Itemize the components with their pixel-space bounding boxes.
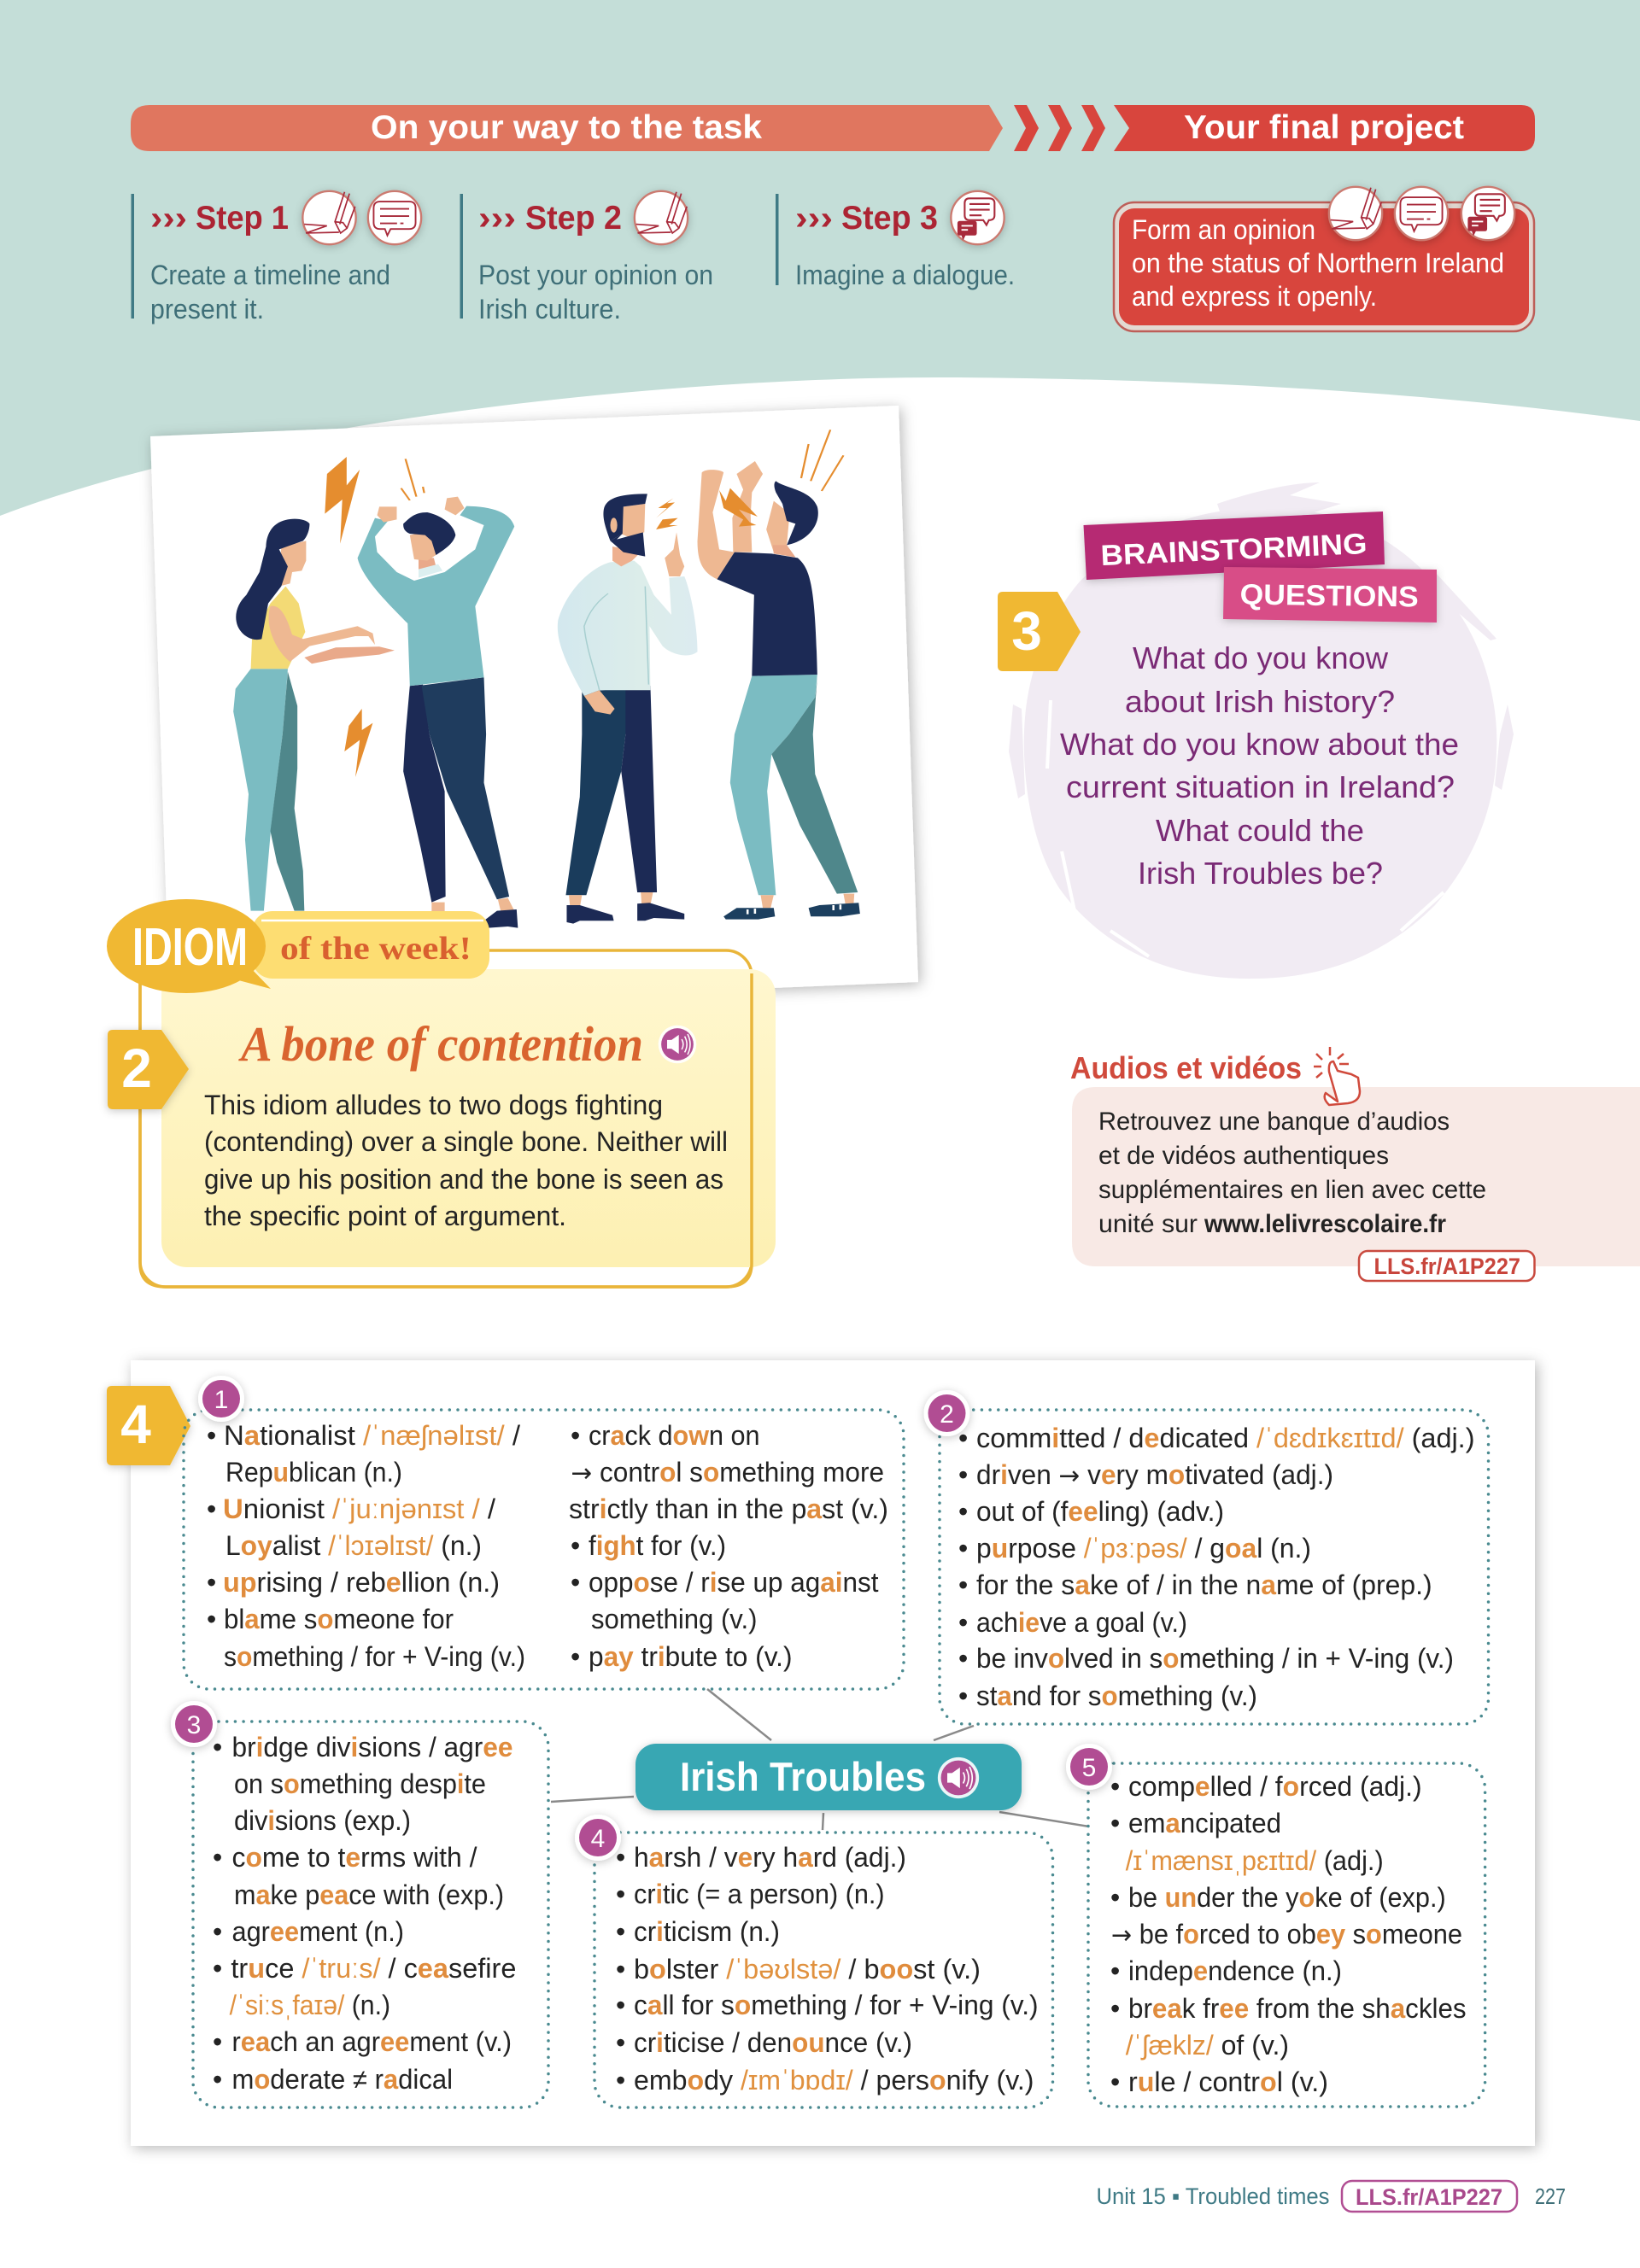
vocabulary box 1: • [571, 1420, 580, 1451]
vocabulary box 5 [1066, 1744, 1485, 2107]
idiom explanation: the specific point of argument. [204, 1201, 566, 1231]
vocabulary box 1: pay tribute to (v.) [589, 1641, 793, 1672]
icon: clicking hand [1314, 1047, 1360, 1105]
vocabulary box 3: divisions (exp.) [234, 1805, 411, 1836]
vocabulary box 1: strictly than in the past (v.) [569, 1493, 888, 1524]
link badge: LLS.fr/A1P227 [1356, 2184, 1502, 2210]
vocabulary box 3: • [213, 2064, 222, 2095]
arrows: three chevrons [1014, 105, 1105, 151]
vocabulary box 4: call for something / for + V-ing (v.) [634, 1990, 1039, 2020]
step 2 [460, 191, 713, 324]
vocabulary box 4: critic (= a person) (n.) [634, 1879, 885, 1909]
idiom explanation: (contending) over a single bone. Neither will [204, 1126, 728, 1157]
badge: number 4 [107, 1386, 190, 1465]
step 1: Step 1 [196, 200, 289, 237]
brush blob background [1009, 482, 1514, 979]
badge: number 2: 2 [121, 1038, 152, 1099]
step 2: ››› [478, 200, 516, 237]
vocabulary box 5: • [1110, 1882, 1120, 1913]
icon: dialogue [1461, 187, 1514, 240]
vocabulary box 1: → control something more [571, 1457, 884, 1488]
body text: www.lelivrescolaire.fr [1204, 1210, 1446, 1238]
vocabulary box 1: something / for + V-ing (v.) [224, 1641, 525, 1672]
banner: on your way to the task [131, 105, 1003, 151]
vocabulary box 3: make peace with (exp.) [234, 1879, 504, 1910]
questions text: What do you know about the [1060, 727, 1459, 762]
footer: 227 [1535, 2183, 1566, 2209]
vocabulary box 2: • [958, 1533, 968, 1564]
vocabulary box 1: crack down on [589, 1420, 760, 1451]
vocabulary box 1: • [207, 1604, 216, 1634]
vocabulary box 5: be under the yoke of (exp.) [1128, 1882, 1446, 1913]
vocabulary box 1: Nationalist /ˈnæʃnəlɪst/ / [224, 1420, 520, 1451]
vocabulary box 4: criticise / denounce (v.) [634, 2027, 912, 2058]
vocabulary box 4: • [616, 1990, 625, 2020]
vocabulary box 4: • [616, 2065, 625, 2096]
number 2 [924, 1390, 970, 1436]
body text: Retrouvez une banque d’audios [1098, 1108, 1450, 1136]
vocabulary box 3: bridge divisions / agree [232, 1732, 512, 1762]
vocabulary box 2: • [958, 1423, 968, 1453]
vocabulary box 5: • [1110, 1771, 1120, 1802]
icon: speech bubble [368, 191, 421, 244]
final project box: on the status of Northern Ireland [1132, 248, 1504, 278]
banner: your final project: Your final project [1184, 109, 1464, 146]
vocabulary box 4 [575, 1815, 1052, 2107]
vocabulary box 4: • [616, 1954, 625, 1984]
vocabulary box 2: • [958, 1607, 968, 1638]
final project box: and express it openly. [1132, 281, 1377, 312]
questions text: What could the [1156, 813, 1364, 848]
vocabulary box 2: achieve a goal (v.) [976, 1607, 1187, 1638]
vocabulary box 2: • [958, 1459, 968, 1490]
footer [1097, 2181, 1566, 2212]
vocabulary box 2: • [958, 1496, 968, 1527]
vocabulary box 5: break free from the shackles [1128, 1993, 1467, 2024]
label: brainstorming [1083, 511, 1385, 580]
label: brainstorming: BRAINSTORMING [1100, 528, 1368, 572]
questions text: What do you know [1133, 640, 1389, 675]
vocabulary box 1: • [207, 1567, 216, 1598]
vocabulary box 2: • [958, 1681, 968, 1711]
number 1 [198, 1376, 244, 1422]
badge: number 4: 4 [120, 1394, 151, 1455]
icon: speech bubble [1395, 187, 1448, 240]
vocabulary box 5: independence (n.) [1128, 1955, 1342, 1986]
vocabulary box 4: harsh / very hard (adj.) [634, 1842, 906, 1873]
label: questions [1223, 567, 1437, 623]
vocabulary box 3: /ˈsiːsˌfaɪə/ (n.) [230, 1990, 390, 2020]
vocabulary box 1 [184, 1376, 904, 1689]
vocabulary box 4: • [616, 1842, 625, 1873]
white brush scratches [1047, 700, 1444, 956]
badge: number 2 [108, 1030, 189, 1109]
vocabulary box 2: out of (feeling) (adv.) [976, 1496, 1224, 1527]
central node: irish troubles [636, 1744, 1022, 1810]
panel: idiom of the week [107, 899, 776, 1287]
idiom explanation: give up his position and the bone is seen as [204, 1164, 723, 1195]
vocabulary box 5: /ɪˈmænsɪˌpɛɪtɪd/ (adj.) [1126, 1845, 1384, 1876]
ribbon: of the week [252, 911, 489, 979]
connector lines [551, 1689, 1089, 1830]
vocabulary box 2: driven → very motivated (adj.) [976, 1459, 1333, 1491]
vocabulary box 4: criticism (n.) [634, 1916, 780, 1947]
questions text: current situation in Ireland? [1066, 769, 1455, 804]
badge: number 3 [998, 592, 1081, 671]
vocabulary box 1: oppose / rise up against [589, 1567, 879, 1598]
questions text: about Irish history? [1125, 684, 1395, 719]
heading: audios et vidéos: Audios et vidéos [1070, 1050, 1302, 1085]
step 2: Irish culture. [478, 294, 621, 324]
vocabulary box 1: Republican (n.) [226, 1457, 402, 1488]
vocabulary box 1: • [571, 1530, 580, 1561]
vocabulary box 1: • [571, 1567, 580, 1598]
final project box: Form an opinion [1132, 214, 1315, 245]
vocabulary box 3: • [213, 1732, 222, 1762]
speech bubble: idiom: IDIOM [132, 918, 248, 977]
vocabulary box 3: on something despite [234, 1768, 486, 1799]
vocabulary box 5: emancipated [1128, 1808, 1281, 1838]
footer: Unit 15 ▪ Troubled times [1097, 2183, 1329, 2209]
photo: arguing people illustration [150, 406, 918, 1013]
idiom explanation: This idiom alludes to two dogs fighting [204, 1090, 663, 1120]
vocabulary box 2 [924, 1390, 1488, 1724]
icon: pencil [302, 191, 356, 244]
icon: pencil [1329, 187, 1382, 240]
vocabulary box 1: uprising / rebellion (n.) [223, 1567, 500, 1598]
vocabulary box 3: truce /ˈtruːs/ / ceasefire [231, 1953, 516, 1984]
body text: unité sur [1098, 1210, 1198, 1238]
heading: a bone of contention: A bone of contention [238, 1016, 643, 1072]
figure: woman [233, 519, 395, 911]
vocabulary box 2: purpose /ˈpɜːpəs/ / goal (n.) [976, 1533, 1311, 1564]
label: questions: QUESTIONS [1239, 579, 1419, 613]
vocabulary box 2: • [958, 1569, 968, 1600]
vocabulary box 5: • [1110, 1993, 1120, 2024]
number 2: 2 [940, 1400, 954, 1429]
body text [1098, 1108, 1486, 1238]
number 5: 5 [1082, 1754, 1096, 1782]
figure: man with raised fists [358, 497, 518, 928]
step 1: ››› [150, 200, 187, 237]
vocabulary box 3 [171, 1701, 548, 2107]
final project box [1114, 187, 1534, 331]
number 4 [575, 1815, 621, 1861]
vocabulary box 3: moderate ≠ radical [232, 2064, 453, 2095]
vocabulary box 5: • [1110, 2066, 1120, 2097]
vocabulary box 3: • [213, 1842, 222, 1873]
link badge: LLS.fr/A1P227 [1374, 1254, 1520, 1279]
vocabulary box 5: → be forced to obey someone [1111, 1919, 1462, 1950]
step 3: ››› [795, 200, 833, 237]
vocabulary box 5: • [1110, 1955, 1120, 1986]
figure: man with raised arms [698, 461, 860, 920]
icon: audio [659, 1026, 696, 1063]
vocabulary box 5: rule / control (v.) [1128, 2066, 1328, 2097]
vocabulary box 2: • [958, 1643, 968, 1674]
speech bubble: idiom [107, 899, 271, 993]
icon: dialogue [951, 191, 1004, 244]
vocabulary box 1: • [571, 1641, 580, 1672]
questions text: Irish Troubles be? [1138, 856, 1383, 891]
panel: vocabulary mind map [107, 1360, 1535, 2146]
vocabulary box 3: reach an agreement (v.) [232, 2026, 512, 2057]
vocabulary box 2: for the sake of / in the name of (prep.) [976, 1569, 1432, 1600]
vocabulary box 1: • [207, 1493, 216, 1524]
vocabulary box 3: • [213, 1916, 222, 1947]
vocabulary box 2: committed / dedicated /ˈdɛdɪkɛɪtɪd/ (adj.) [976, 1423, 1474, 1453]
figure: bearded man [558, 494, 698, 924]
step 3: Step 3 [841, 200, 938, 237]
vocabulary box 1: • [207, 1420, 216, 1451]
vocabulary box 1: Unionist /ˈjuːnjənɪst / / [223, 1493, 495, 1524]
banner: on your way to the task: On your way to the task [371, 109, 762, 146]
vocabulary box 1: Loyalist /ˈlɔɪəlɪst/ (n.) [226, 1530, 482, 1561]
vocabulary box 3: • [213, 2026, 222, 2057]
vocabulary box 4: • [616, 2027, 625, 2058]
vocabulary box 2: be involved in something / in + V-ing (v.) [976, 1643, 1454, 1674]
vocabulary box 4: bolster /ˈbəʊlstə/ / boost (v.) [634, 1954, 981, 1984]
vocabulary box 4: • [616, 1879, 625, 1909]
panel: brainstorming questions [998, 482, 1514, 979]
body text: supplémentaires en lien avec cette [1098, 1176, 1486, 1204]
panel: audios et videos [1070, 1047, 1640, 1281]
icon: audio [938, 1757, 979, 1798]
vocabulary box 3: come to terms with / [232, 1842, 477, 1873]
number 4: 4 [591, 1825, 605, 1853]
number 3: 3 [187, 1711, 201, 1739]
central node: irish troubles: Irish Troubles [680, 1754, 926, 1799]
ribbon: of the week: of the week! [280, 931, 472, 967]
vocabulary box 1: fight for (v.) [589, 1530, 726, 1561]
vocabulary box 3: • [213, 1953, 222, 1984]
idiom explanation [204, 1090, 728, 1231]
vocabulary box 5: /ˈʃæklz/ of (v.) [1126, 2030, 1289, 2060]
vocabulary box 1: blame someone for [224, 1604, 454, 1634]
step 2: Step 2 [525, 200, 622, 237]
vocabulary box 2: stand for something (v.) [976, 1681, 1257, 1711]
vocabulary box 5: compelled / forced (adj.) [1128, 1771, 1422, 1802]
vocabulary box 1: something (v.) [591, 1604, 757, 1634]
questions text [1060, 640, 1459, 891]
step 3: Imagine a dialogue. [795, 260, 1015, 290]
icon: pencil [635, 191, 688, 244]
badge: number 3: 3 [1011, 600, 1042, 662]
number 3 [171, 1701, 217, 1747]
vocabulary box 4: embody /ɪmˈbɒdɪ/ / personify (v.) [634, 2065, 1034, 2096]
step 2: Post your opinion on [478, 260, 713, 290]
step 1 [132, 191, 421, 324]
vocabulary box 4: • [616, 1916, 625, 1947]
banner: your final project [1114, 105, 1535, 151]
step 3 [776, 191, 1015, 290]
number 5 [1066, 1744, 1112, 1790]
number 1: 1 [214, 1386, 228, 1414]
step 1: present it. [150, 294, 264, 324]
vocabulary box 5: • [1110, 1808, 1120, 1838]
icon: lightning bolts and shout lines [325, 430, 843, 777]
vocabulary box 3: agreement (n.) [232, 1916, 404, 1947]
step 1: Create a timeline and [150, 260, 390, 290]
body text: et de vidéos authentiques [1098, 1142, 1389, 1170]
